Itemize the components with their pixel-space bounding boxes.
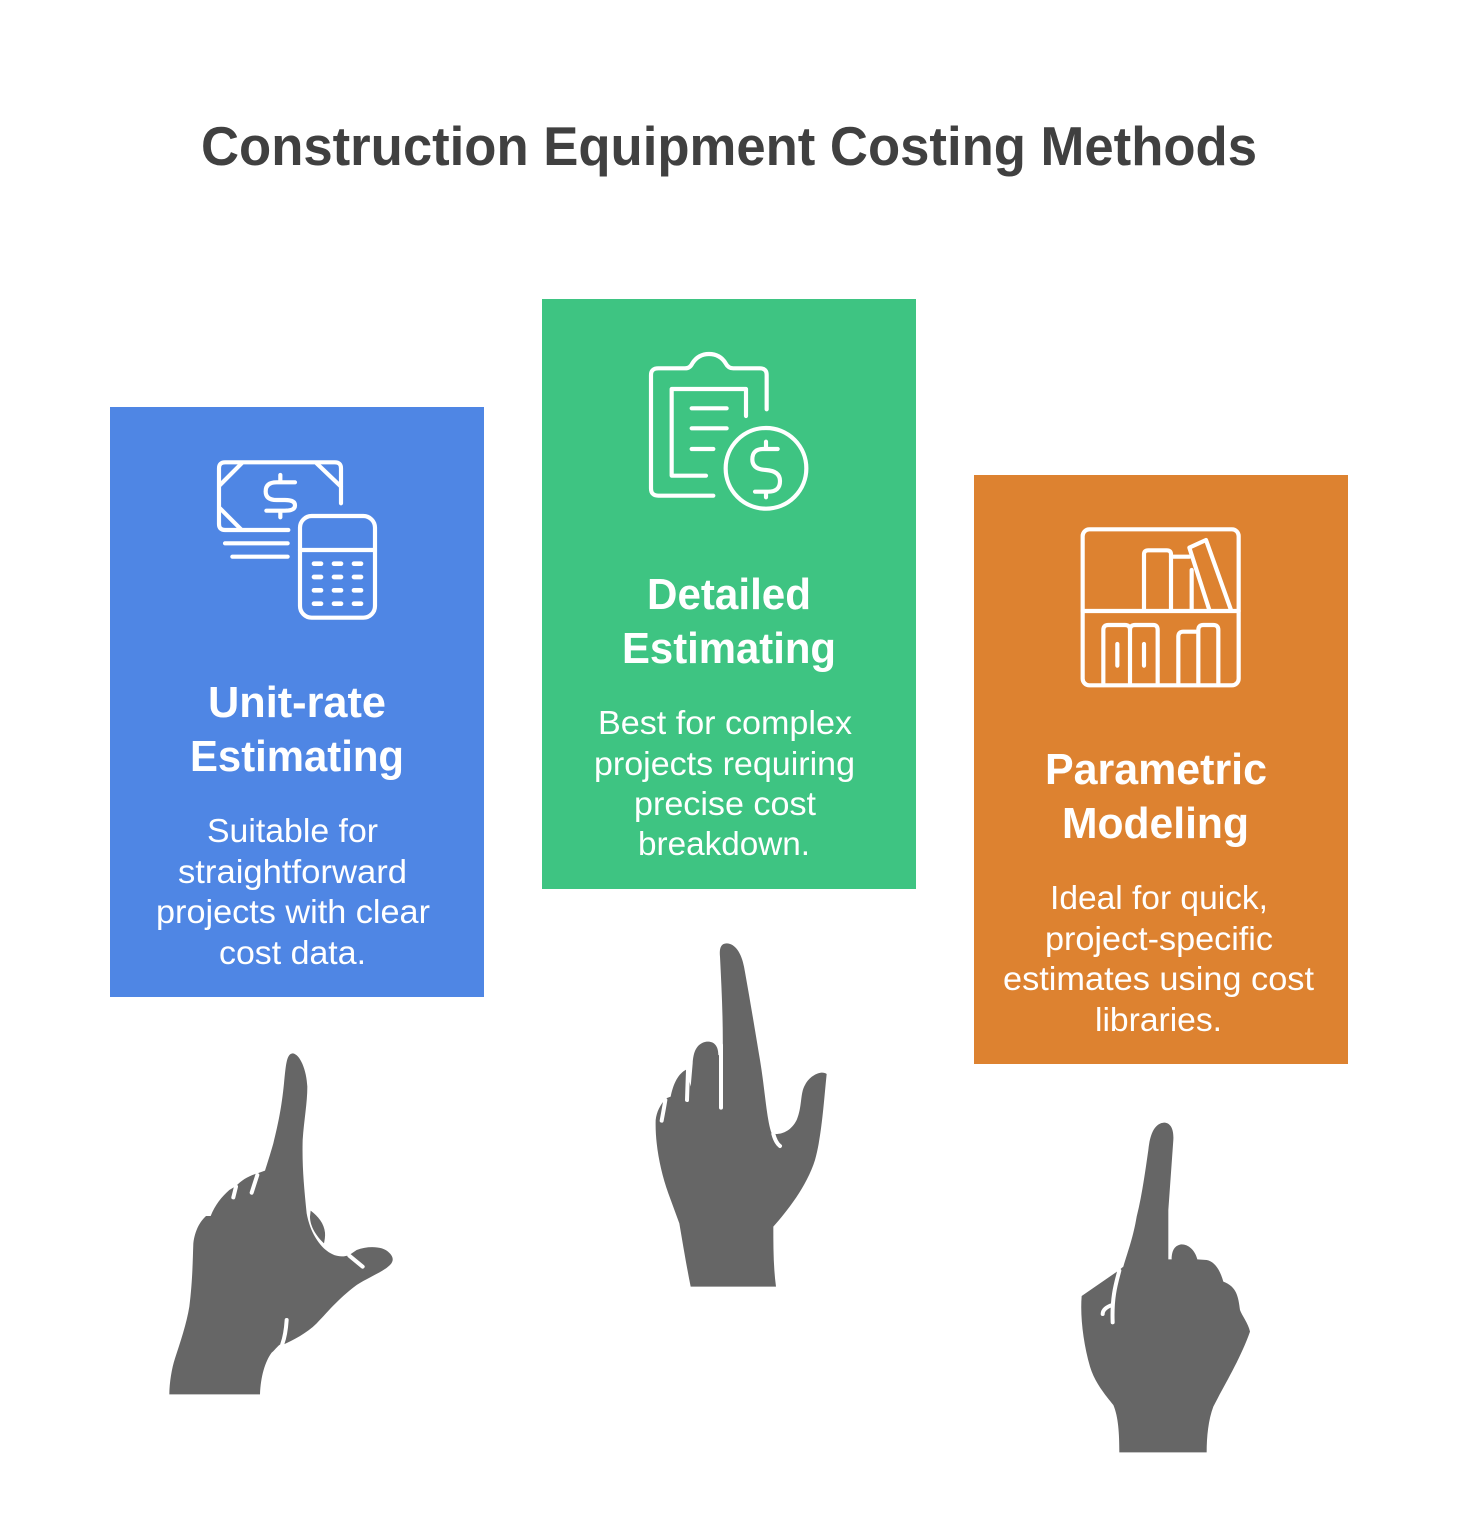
heading: unit-rate estimating: Unit-rate: [208, 678, 386, 727]
text: parametric description: project-specific: [1045, 921, 1273, 958]
heading: detailed estimating: Detailed: [647, 570, 811, 619]
panel background: orange: [974, 475, 1348, 1064]
text: unit-rate description: straightforward: [178, 854, 407, 891]
icon: money and calculator: [219, 462, 375, 618]
icon: left hand pointing up: [169, 1053, 393, 1394]
text: parametric description: Ideal for quick,: [1050, 880, 1268, 917]
panel background: green: [542, 299, 916, 889]
heading: detailed estimating: Estimating: [622, 624, 836, 673]
text: unit-rate description: [156, 813, 430, 972]
icon: clipboard with dollar coin: [651, 354, 806, 509]
heading: unit-rate estimating: Estimating: [190, 732, 404, 781]
text: parametric description: libraries.: [1095, 1002, 1222, 1039]
title: Construction Equipment Costing Methods: [201, 115, 1257, 177]
icon: centre hand pointing up: [656, 943, 827, 1287]
icon: right hand pointing up: [1081, 1123, 1250, 1452]
text: unit-rate description: projects with clear: [156, 894, 430, 931]
text: unit-rate description: cost data.: [219, 935, 366, 972]
heading: unit-rate estimating: [190, 678, 404, 781]
text: detailed description: breakdown.: [638, 826, 810, 863]
text: detailed description: [594, 705, 855, 863]
heading: parametric modeling: Modeling: [1062, 799, 1249, 848]
text: detailed description: Best for complex: [598, 705, 852, 742]
panel background: blue: [110, 407, 484, 997]
text: detailed description: projects requiring: [594, 746, 855, 783]
text: parametric description: estimates using cost: [1003, 961, 1315, 998]
panel: unit-rate estimating: [110, 407, 484, 997]
text: unit-rate description: Suitable for: [207, 813, 378, 850]
heading: detailed estimating: [622, 570, 836, 673]
panel: parametric modeling: [974, 475, 1348, 1064]
text: parametric description: [1003, 880, 1315, 1039]
heading: parametric modeling: [1045, 745, 1267, 848]
panel: detailed estimating: [542, 299, 916, 889]
text: detailed description: precise cost: [634, 786, 817, 823]
heading: parametric modeling: Parametric: [1045, 745, 1267, 794]
icon: bookshelf: [1083, 529, 1239, 685]
